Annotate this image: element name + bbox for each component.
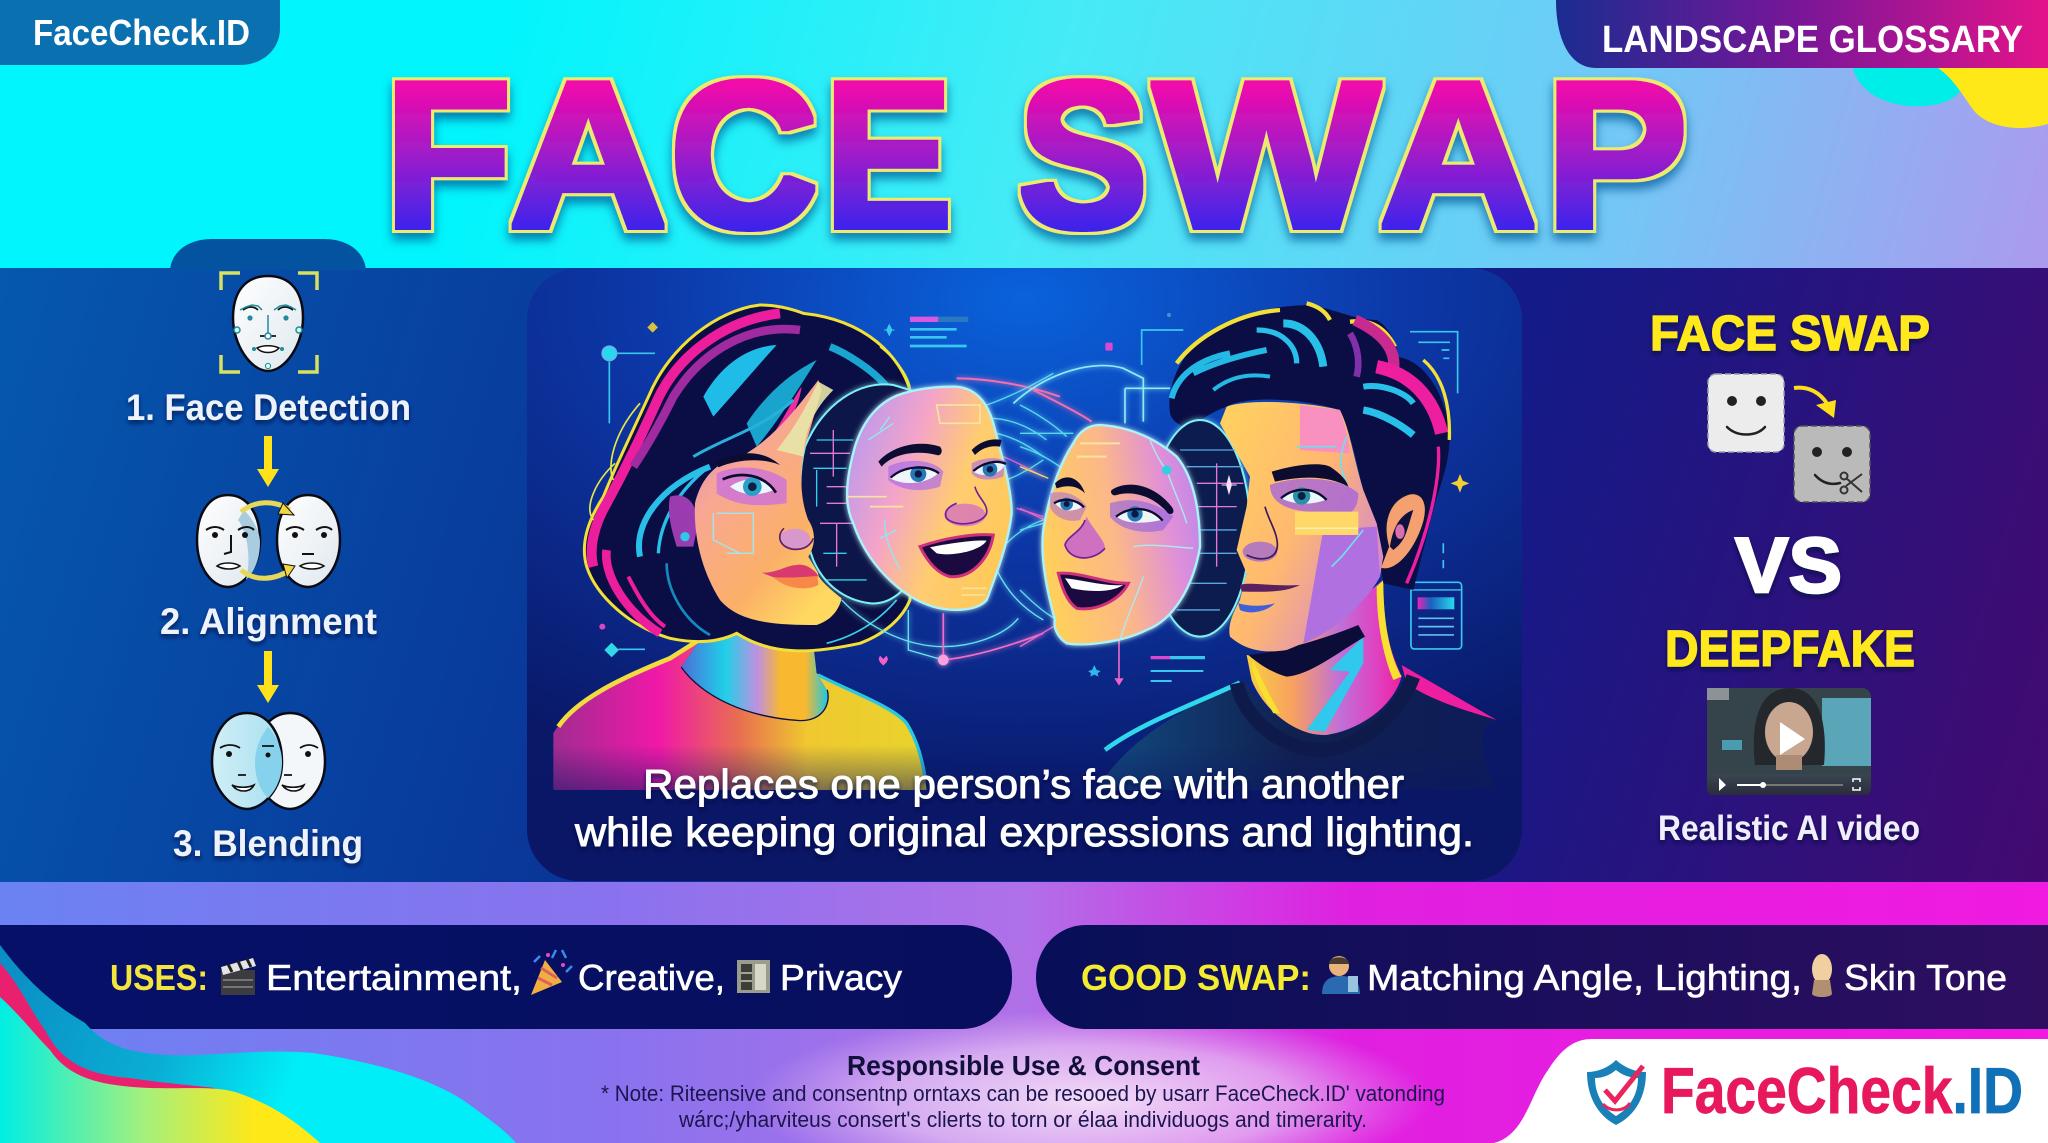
footer: note text: * Note: Riteensive and consentnp orntaxs can be resooed by usarr FaceCheck.ID' vatonding: [601, 1081, 1445, 1106]
title: FACE SWAP: P: [1545, 39, 1688, 272]
header tab: FaceCheck.ID: [0, 0, 280, 65]
title: FACE SWAP: E: [824, 39, 952, 272]
pill: uses: [0, 925, 1012, 1029]
title: FACE SWAP: A: [1379, 39, 1538, 272]
main dark band: [0, 268, 2048, 882]
face: [695, 380, 842, 625]
icon: party popper: [531, 950, 572, 995]
caption: Replaces one person’s face with another: [643, 761, 1404, 807]
arrow: step 2 to 3: [257, 651, 279, 703]
bottom background band: [0, 880, 2048, 1143]
header tab: FaceCheck.ID: FaceCheck.ID: [33, 12, 250, 53]
matching angle, lighting: Matching Angle, Lighting,: [1367, 957, 1802, 998]
icon: source smiley: [1708, 374, 1784, 452]
circuit decorations right: [1088, 313, 1469, 686]
bottom background soft glow: [750, 1010, 1430, 1143]
title: FACE SWAP: S: [1018, 39, 1148, 272]
title: FACE SWAP: A: [509, 39, 668, 272]
shirt: [1097, 665, 1497, 790]
face: [1220, 402, 1383, 651]
icon: face detection: [221, 273, 317, 372]
label: step 2: 2. Alignment: [160, 601, 377, 642]
icon: privacy door: [737, 960, 770, 993]
floating face mask: [847, 387, 1012, 610]
good swap label: GOOD SWAP:: [1081, 957, 1311, 998]
ear and earring: [669, 495, 697, 547]
skin tone: Skin Tone: [1844, 957, 2007, 998]
heading: face swap: FACE SWAP: [1650, 307, 1930, 361]
arrow: swap: [1794, 388, 1836, 418]
top background band: [0, 0, 2048, 270]
hair: [584, 305, 910, 651]
icon: blending: [212, 713, 325, 809]
neural arcs: [842, 373, 1060, 665]
footer: responsible use heading: Responsible Use & Consent: [847, 1050, 1200, 1081]
footer: note text: [601, 1081, 1445, 1132]
caption: while keeping original expressions and lighting.: [574, 809, 1474, 855]
header tab: Landscape Glossary: LANDSCAPE GLOSSARY: [1602, 19, 2023, 61]
title: FACE SWAP: W: [1153, 39, 1381, 272]
tab above step column: [170, 239, 366, 270]
entertainment: Entertainment,: [266, 957, 522, 998]
icon: skin tone figure: [1812, 954, 1832, 997]
neural arcs: [1013, 366, 1170, 647]
neck: [1247, 580, 1402, 735]
caption: [574, 761, 1474, 855]
shirt: [553, 638, 927, 790]
neck: [682, 635, 828, 720]
panel: process steps: [126, 273, 411, 864]
floating face mask: [1042, 425, 1200, 644]
panel: central illustration: [527, 268, 1522, 881]
bottom fade under caption: [527, 745, 1522, 881]
label: step 3: 3. Blending: [173, 823, 363, 864]
panel: face swap vs deepfake: [1650, 307, 1930, 848]
header tab: Landscape Glossary: [1556, 0, 2048, 68]
heading: deepfake: DEEPFAKE: [1665, 620, 1915, 677]
decorative corner blobs top right: [1853, 68, 2048, 128]
footer: note text: wárc;/yharviteus consert's clierts to torn or élaa individuogs and timerarity.: [678, 1107, 1367, 1132]
title: FACE SWAP: [384, 39, 1688, 272]
icon: alignment: [197, 495, 340, 587]
title: FACE SWAP: F: [384, 39, 512, 272]
creative: Creative,: [578, 957, 725, 998]
title: FACE SWAP: C: [670, 39, 818, 272]
label: realistic AI video: Realistic AI video: [1658, 809, 1920, 848]
illustration: man and his floating face: [1013, 303, 1497, 790]
label: step 1: 1. Face Detection: [126, 387, 411, 428]
video thumbnail: [1707, 688, 1871, 795]
icon: man at laptop: [1322, 956, 1360, 994]
icon: clapperboard: [221, 958, 256, 995]
decorative wave shapes bottom left: [0, 945, 516, 1143]
arrow: step 1 to 2: [257, 436, 279, 487]
logo wordmark: FaceCheck.ID: [1661, 1054, 2023, 1127]
illustration: woman and her floating face: [553, 305, 1060, 790]
text: VS: VS: [1735, 521, 1842, 609]
icon: shield logo: [1587, 1060, 1646, 1125]
pill: good swap: [1036, 925, 2048, 1029]
grid oval behind left mask: [800, 384, 910, 603]
icon: target smiley with scissors: [1794, 426, 1870, 502]
privacy: Privacy: [780, 957, 902, 998]
ear: [1380, 493, 1426, 569]
circuit decorations left: [599, 319, 968, 666]
logo panel: [1494, 1039, 2048, 1143]
uses label: USES:: [110, 957, 208, 998]
hair: [1169, 303, 1450, 590]
grid oval behind right mask: [1150, 420, 1250, 637]
